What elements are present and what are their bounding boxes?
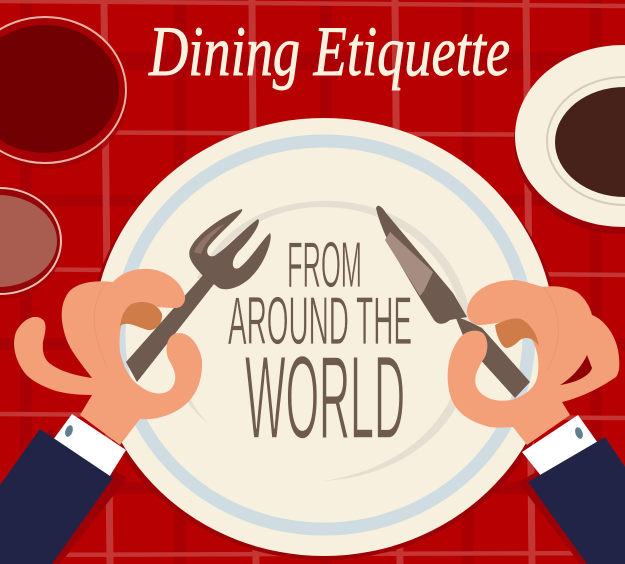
red gap between fingers	[560, 355, 592, 385]
left hand	[0, 269, 202, 564]
left cufflink	[64, 424, 74, 438]
left finger crease	[94, 282, 107, 367]
coffee cup and saucer	[514, 45, 625, 234]
knife	[376, 206, 530, 398]
right thumb patch	[495, 318, 539, 348]
left sleeve shadow	[0, 429, 127, 564]
plate heading text: FROM	[287, 228, 362, 301]
right hand shape	[448, 280, 619, 445]
right sleeve	[528, 437, 625, 564]
left hand shape	[14, 269, 202, 445]
right cufflink	[574, 426, 584, 440]
fork	[126, 209, 271, 382]
left thumb patch	[120, 302, 162, 330]
wine glass large	[0, 17, 128, 169]
small glass	[0, 188, 62, 299]
right finger crease	[543, 287, 558, 370]
title: Dining Etiquette	[148, 13, 510, 91]
left sleeve	[0, 429, 113, 564]
plate heading text	[228, 228, 412, 464]
right cuff	[522, 415, 600, 482]
plate	[88, 118, 560, 560]
left cuff	[50, 414, 126, 482]
right hand	[448, 280, 625, 564]
right sleeve shadow	[518, 437, 625, 564]
